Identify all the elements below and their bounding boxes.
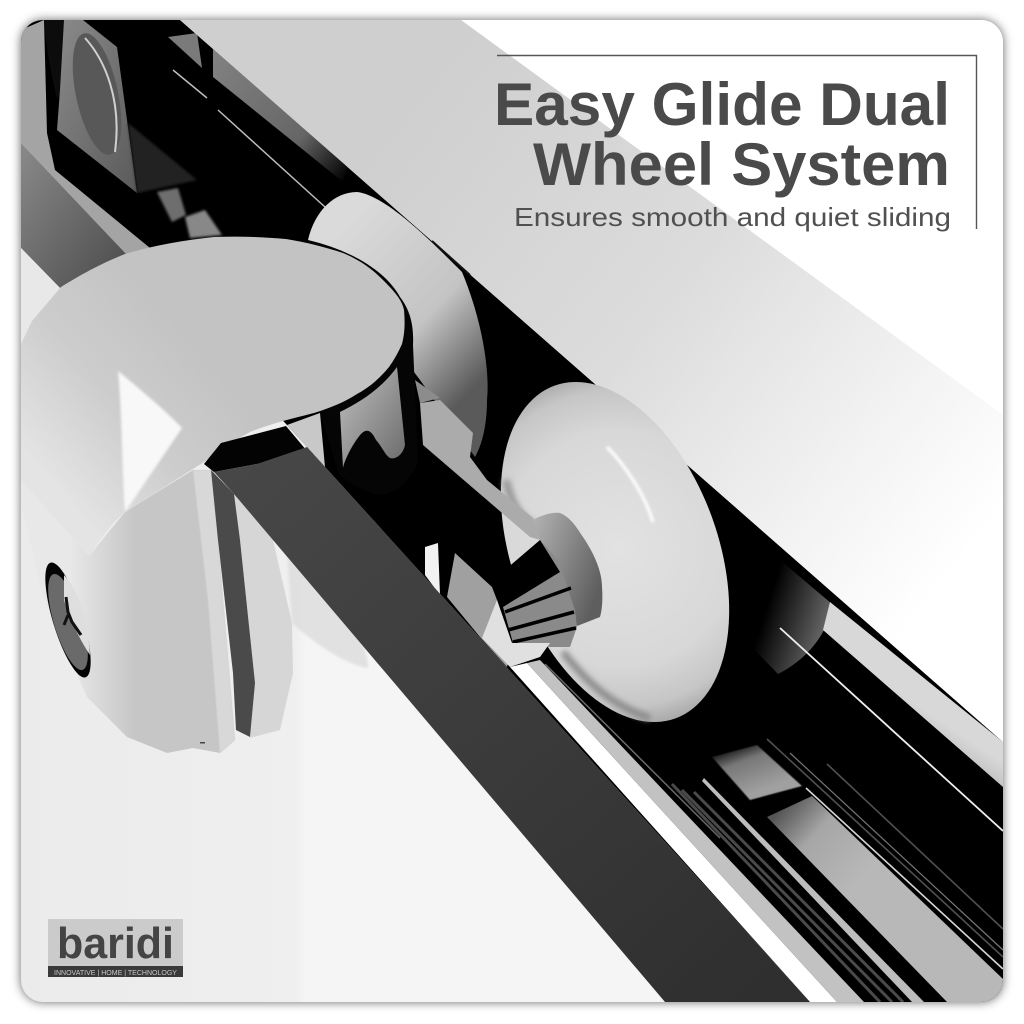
top glass panel — [180, 20, 1003, 742]
mount block — [420, 400, 540, 540]
neck side sliver — [287, 413, 325, 467]
knob lower body — [21, 470, 235, 753]
screw cross — [64, 597, 81, 635]
cone black stripes — [505, 588, 576, 642]
cone top shadow — [503, 540, 560, 607]
gray reflection near top — [168, 33, 202, 68]
bright chrome line — [806, 788, 1003, 969]
silver rail edge — [527, 660, 864, 1002]
chrome cone — [503, 540, 577, 647]
gray mounting plate — [57, 20, 137, 193]
top left mounting hardware — [21, 20, 347, 255]
gray edge strip — [213, 49, 347, 182]
knob top surface — [21, 237, 405, 556]
large dark frame bar — [214, 447, 810, 1002]
title: Wheel System — [533, 131, 950, 198]
knob screw opening — [36, 558, 100, 682]
opening black — [36, 558, 100, 682]
wheel specular highlight — [607, 447, 653, 522]
knob shadow on wall — [285, 520, 368, 668]
wheel shadow near hub — [563, 652, 650, 718]
hub — [533, 513, 602, 626]
silver side piece — [21, 20, 150, 255]
opening gray — [40, 570, 96, 674]
gray mount wedge — [415, 380, 440, 403]
logo: baridi — [48, 919, 183, 977]
gray rail lip line — [545, 664, 720, 838]
silver facet — [447, 553, 512, 667]
wheel left shadow — [506, 480, 535, 525]
vertical dark strip — [211, 470, 255, 737]
chrome neck — [308, 240, 418, 495]
title frame — [497, 56, 976, 229]
handle knob — [21, 237, 418, 753]
screw head — [72, 33, 122, 154]
gray chrome line — [790, 753, 1003, 950]
logo wordmark: baridi — [57, 919, 174, 968]
dark gray frame strip — [21, 143, 127, 288]
white sliver — [425, 543, 440, 595]
subtitle: Ensures smooth and quiet sliding — [514, 202, 951, 232]
white base — [482, 600, 550, 667]
small reflection shape right — [185, 210, 222, 238]
cone body — [503, 540, 577, 647]
dark reflection triangle — [128, 123, 197, 193]
light band beside strip — [193, 470, 235, 753]
neck highlight — [340, 367, 405, 468]
silver rail band — [823, 602, 1003, 787]
mirror reflection upper — [712, 745, 802, 800]
black side slot — [44, 20, 64, 98]
chrome lines on the right — [767, 739, 1003, 957]
third wheel in shadow — [758, 565, 830, 674]
lower rail stripes — [545, 664, 1003, 1002]
wheel body — [500, 382, 730, 722]
knob tiny mark — [200, 742, 205, 744]
knob right lobe — [234, 494, 293, 738]
white rail edge — [510, 663, 837, 1002]
front wheel — [498, 382, 730, 724]
thin rail line — [173, 70, 325, 207]
small reflection shape left — [157, 188, 186, 222]
light left wall — [21, 248, 60, 288]
logo tagline: INNOVATIVE | HOME | TECHNOLOGY — [54, 968, 177, 977]
dark chrome stripes — [672, 784, 903, 1002]
mirror reflection lower — [767, 796, 1003, 1002]
silver chrome stripe — [702, 778, 924, 1002]
back wheel — [308, 192, 488, 457]
knob notch — [204, 426, 307, 472]
logo background — [48, 919, 183, 966]
title: Easy Glide Dual — [494, 71, 950, 138]
chrome reflections — [425, 543, 550, 667]
thin white rail line — [780, 628, 1003, 831]
opening inner light — [64, 575, 90, 655]
knob white highlight — [118, 371, 182, 512]
screw slot highlight — [85, 38, 117, 152]
white upper right corner — [461, 20, 1003, 415]
dark edge on panel — [432, 241, 470, 275]
logo tagline band — [48, 966, 183, 977]
